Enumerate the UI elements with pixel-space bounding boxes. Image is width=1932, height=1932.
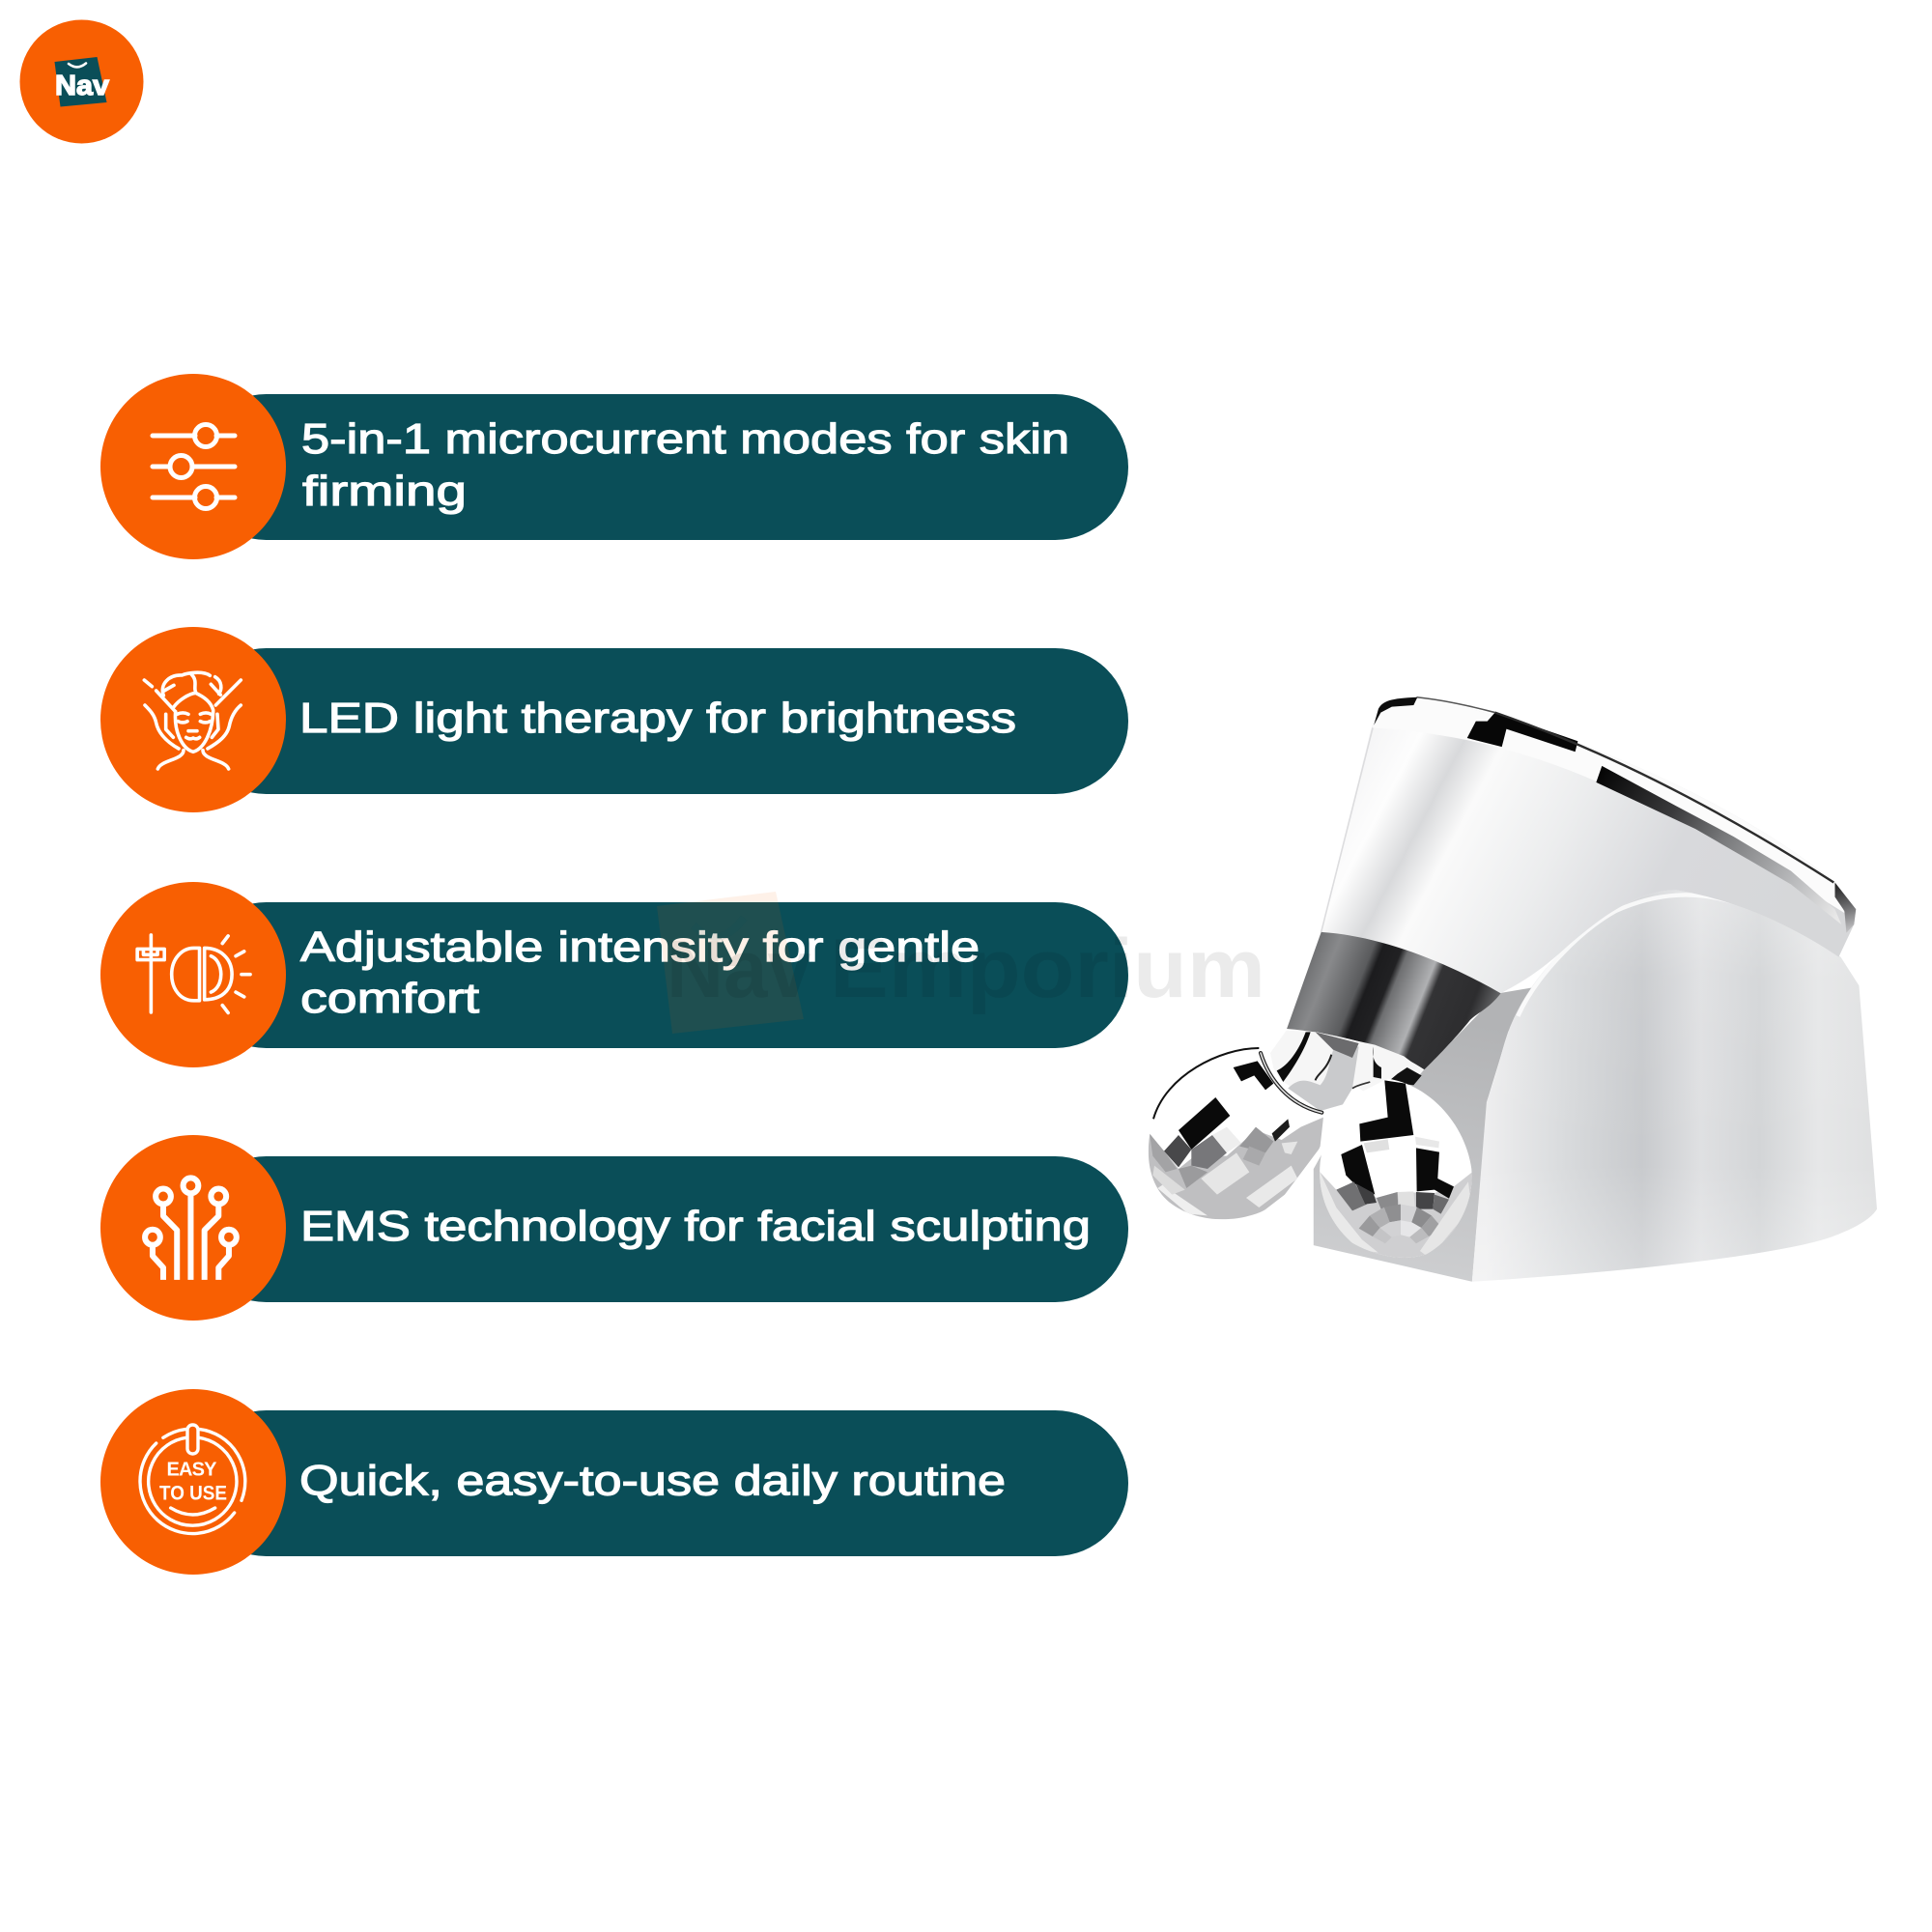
head mirror rim bbox=[1321, 697, 1856, 933]
icon circle bbox=[100, 1389, 286, 1575]
stand block bbox=[1314, 987, 1533, 1282]
logo badge bbox=[19, 19, 143, 143]
feature row: EMS technology bbox=[100, 1135, 1128, 1321]
pill bbox=[193, 1410, 1128, 1556]
watermark: Nav Emporium bbox=[657, 892, 1265, 1034]
pill bbox=[193, 902, 1128, 1048]
feature text: EMS technology for facial sculpting bbox=[300, 1203, 1091, 1250]
feature text: firming bbox=[302, 468, 467, 515]
icon: circuit traces bbox=[145, 1178, 237, 1280]
roller left bbox=[1147, 1048, 1323, 1227]
pill bbox=[193, 394, 1128, 540]
pill bbox=[193, 1156, 1128, 1302]
logo bag bbox=[54, 57, 106, 106]
product: facial roller device bbox=[1147, 697, 1877, 1282]
feature text: comfort bbox=[300, 975, 479, 1022]
dark collar bbox=[1287, 932, 1501, 1069]
feature text: Quick, easy-to-use daily routine bbox=[299, 1457, 1006, 1505]
feature row: microcurrent modes bbox=[100, 374, 1128, 559]
feature text: Adjustable intensity for gentle bbox=[300, 923, 980, 971]
icon circle bbox=[100, 374, 286, 559]
stand dome bbox=[1472, 890, 1877, 1282]
icon circle bbox=[100, 1135, 286, 1321]
feature text: LED light therapy for brightness bbox=[299, 695, 1016, 742]
icon: easy to use power button: TO USE bbox=[159, 1481, 227, 1504]
icon: easy to use power button bbox=[140, 1425, 245, 1534]
icon: dimmer and lamp bbox=[137, 935, 250, 1012]
logo wordmark: Nav bbox=[55, 71, 109, 101]
feature row: LED light therapy bbox=[100, 627, 1128, 812]
rollers bbox=[1147, 1031, 1478, 1263]
pill bbox=[193, 648, 1128, 794]
roller right bbox=[1317, 1079, 1478, 1263]
feature text: 5-in-1 microcurrent modes for skin bbox=[301, 415, 1069, 463]
feature row: adjustable intensity bbox=[100, 882, 1128, 1067]
roller collars bbox=[1261, 1053, 1321, 1113]
icon circle bbox=[100, 882, 286, 1067]
icon: sliders bbox=[153, 425, 235, 508]
watermark: Nav Emporium: Nav bbox=[667, 923, 811, 1014]
icon circle bbox=[100, 627, 286, 812]
roller necks bbox=[1270, 1031, 1423, 1111]
head bbox=[1321, 697, 1856, 993]
icon: easy to use power button: EASY bbox=[166, 1460, 217, 1481]
icon: face massage bbox=[144, 672, 241, 769]
watermark: Nav Emporium: Emporium bbox=[830, 923, 1265, 1015]
feature row: easy to use bbox=[100, 1389, 1128, 1575]
device body bbox=[1287, 697, 1877, 1282]
